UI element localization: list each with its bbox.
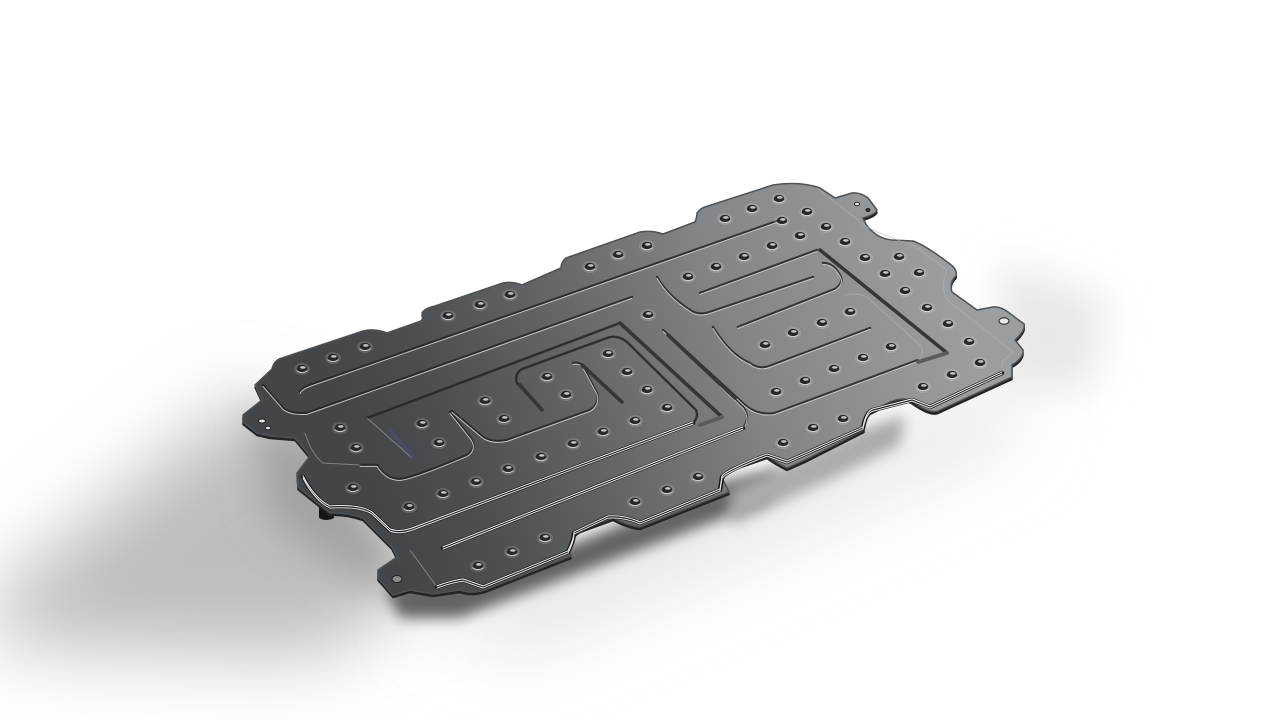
- plate: [243, 184, 1024, 597]
- rivets: [294, 193, 988, 572]
- plate surface: [243, 184, 1024, 595]
- bright double lines: [303, 373, 1002, 587]
- dark trenches: [520, 250, 947, 417]
- mounting holes: [258, 202, 1009, 583]
- foot under plate: [319, 505, 334, 520]
- faint lines: [305, 188, 1013, 587]
- thin pressed lines: [263, 220, 918, 479]
- plate edge: [243, 186, 1024, 597]
- drop shadow: [0, 260, 1110, 655]
- channels: [263, 188, 1013, 588]
